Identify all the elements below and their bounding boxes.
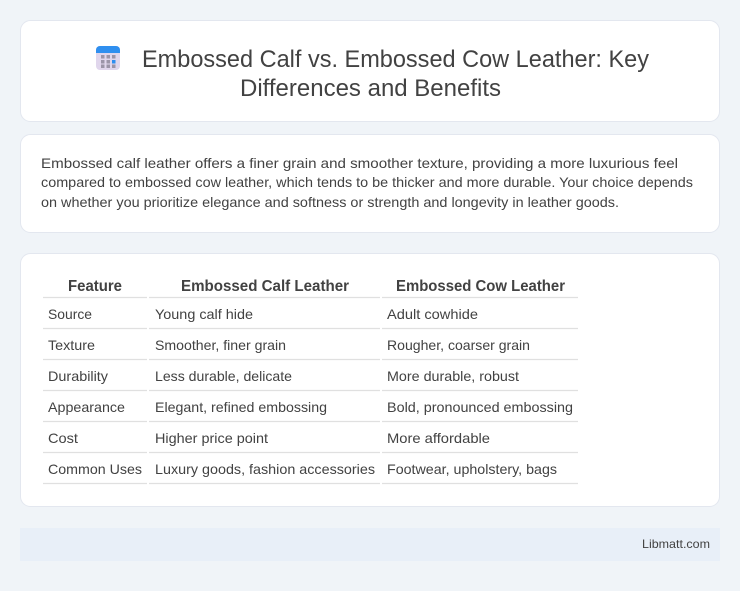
table header [68,278,565,295]
panel: comparison table [20,254,720,506]
text block: summary [41,155,693,210]
table header: Embossed Calf Leather [181,278,349,295]
row: source: Adult cowhide [387,306,478,322]
row: durability: More durable, robust [387,368,519,384]
row: source: Young calf hide [155,306,253,322]
row: appearance: Appearance [48,399,125,415]
text block: summary: on whether you prioritize elegance and softness or strength and longevity in leather goods. [41,194,619,210]
icon: calendar [96,46,120,70]
row: cost: Cost [48,430,78,446]
row: common uses: Common Uses [48,461,142,477]
panel: title [20,20,720,122]
panel: intro text [20,134,720,232]
footer: Libmatt.com [642,537,710,551]
row: source [48,306,478,322]
row: texture: Texture [48,337,95,353]
table header: Feature [68,278,122,295]
row: source: Source [48,306,92,322]
row: texture: Rougher, coarser grain [387,337,530,353]
row: texture: Smoother, finer grain [155,337,286,353]
row: durability: Less durable, delicate [155,368,292,384]
row: cost: Higher price point [155,430,268,446]
row: appearance: Bold, pronounced embossing [387,399,573,415]
row: durability: Durability [48,368,108,384]
text block: summary: compared to embossed cow leather, which tends to be thicker and more durable. Your choice depends [41,174,693,190]
row: common uses: Footwear, upholstery, bags [387,461,557,477]
row: appearance [48,399,573,415]
heading: Embossed Calf vs. Embossed Cow Leather: Key [142,46,649,73]
row: texture [48,337,530,353]
footer [20,528,720,561]
row: cost [48,430,490,446]
text block: summary: Embossed calf leather offers a finer grain and smoother texture, providing a more luxurious feel [41,155,678,171]
row: durability [48,368,519,384]
row: appearance: Elegant, refined embossing [155,399,327,415]
heading [142,46,649,102]
row: common uses [48,461,557,477]
row: cost: More affordable [387,430,490,446]
table header: Embossed Cow Leather [396,278,565,295]
heading: Differences and Benefits [240,75,501,102]
row: common uses: Luxury goods, fashion accessories [155,461,375,477]
table rules [43,298,578,484]
